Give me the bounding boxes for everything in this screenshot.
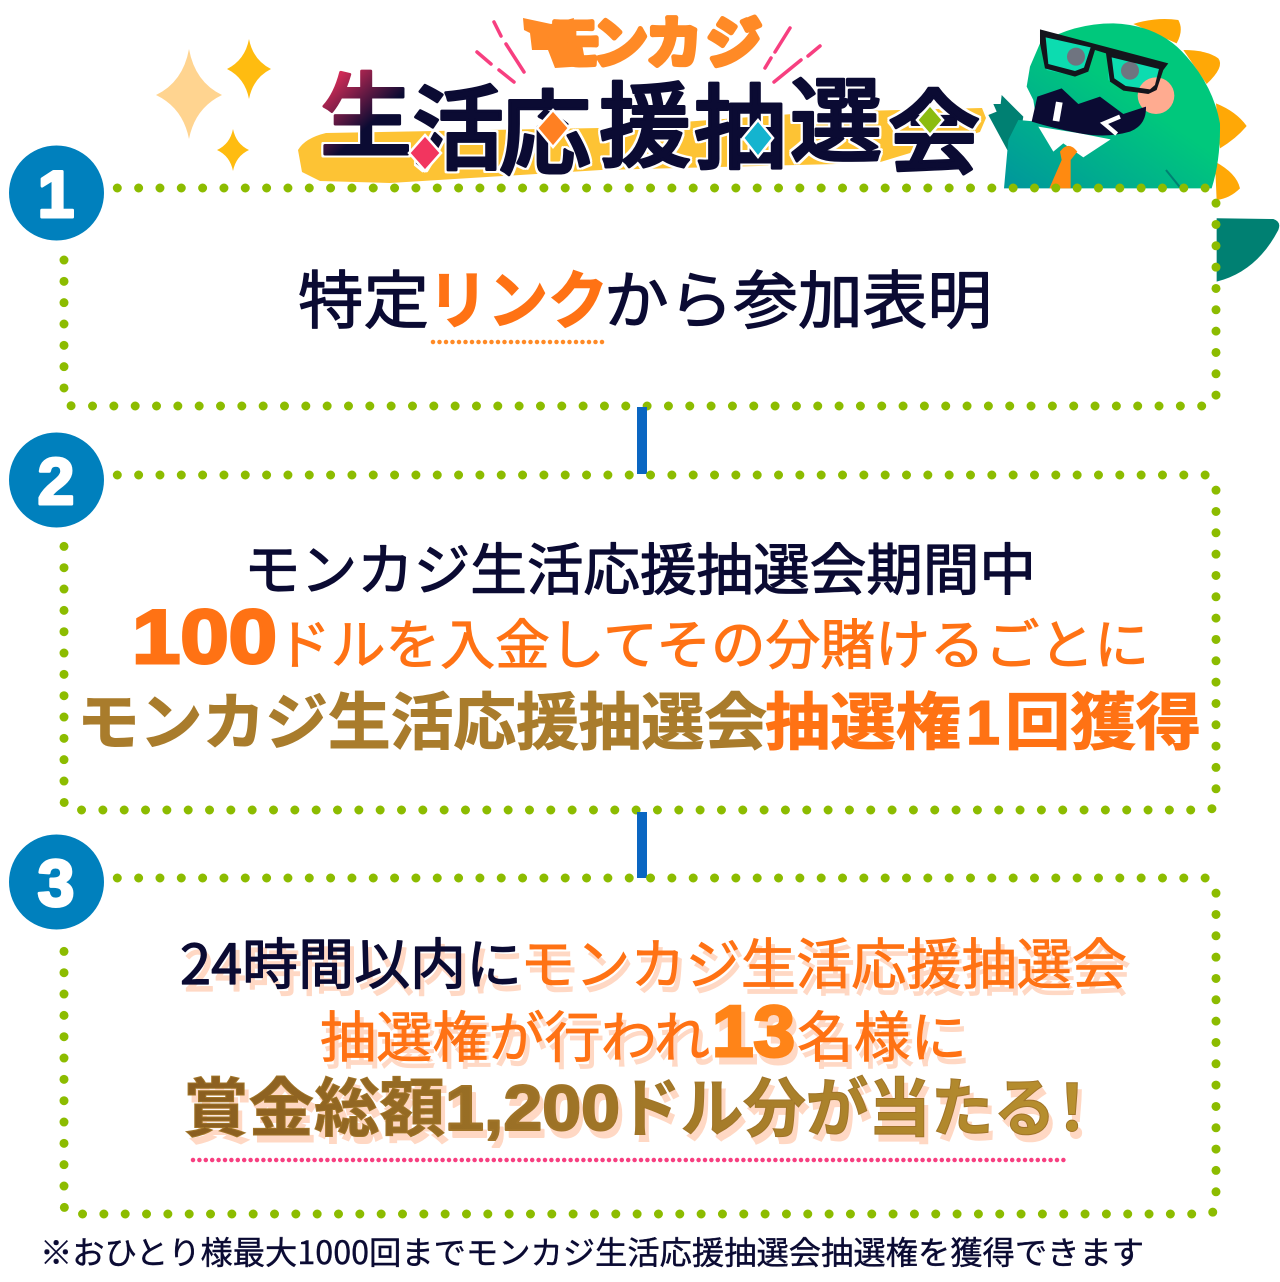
glasses frame [1040, 29, 1168, 94]
footnote: ※おひとり様最大1000回までモンカジ生活応援抽選会抽選権を獲得できます [40, 1228, 1144, 1274]
step 2 text [77, 526, 1201, 762]
panel 2 border [64, 475, 1216, 810]
step 3 text: 24時間以内に [180, 920, 522, 1000]
panel 1 border [64, 188, 1216, 406]
logo wordmark: モンカジ [545, 0, 762, 80]
necktie [1049, 146, 1077, 188]
icon: large peach sparkle [156, 49, 222, 139]
back spikes [1133, 19, 1247, 200]
collar [1038, 127, 1111, 157]
orange dotted underline [433, 340, 603, 344]
step 3 text: ！ [1040, 1058, 1104, 1150]
tooth and wink marks [1053, 102, 1063, 122]
step badge 2 [9, 432, 104, 528]
character: green dinosaur [988, 19, 1279, 282]
step 3 text: 13 [712, 992, 795, 1072]
step badge 1 [9, 146, 104, 240]
step 2 text: ドルを入金してその分賭けるごとに [276, 601, 1149, 680]
step 3 text: 1,200 [445, 1072, 620, 1144]
step 2 text: モンカジ生活応援抽選会 [77, 672, 767, 762]
step 1 text: 特定 [298, 251, 429, 342]
step 2 text: 回獲得 [1005, 672, 1201, 762]
eyes [1067, 48, 1085, 66]
step badge 3 [9, 834, 104, 930]
title diamonds [409, 105, 943, 171]
icon: gold sparkle bottom [217, 129, 249, 171]
glasses lenses [1043, 35, 1095, 76]
body [1004, 23, 1220, 188]
pink burst lines [477, 22, 820, 82]
pink dotted underline [193, 1158, 1068, 1162]
step 2 text: 100 [132, 595, 277, 680]
icon: gold sparkle top [227, 39, 271, 99]
connector 1 to 2 [637, 407, 647, 474]
logo dragon head [523, 18, 586, 68]
step 3 text: ドル分が当たる [618, 1058, 1056, 1150]
step badge 1: 1 [38, 157, 74, 231]
connector 2 to 3 [637, 812, 647, 878]
panel 3 border [64, 878, 1216, 1214]
step 3 text [180, 920, 1127, 1150]
step 3 text: モンカジ生活応援抽選会 [520, 920, 1127, 1000]
yellow brush stroke [298, 108, 986, 183]
step 2 text: 1 [966, 689, 1000, 758]
cheek [1138, 77, 1174, 114]
step 1 text: リンク [428, 251, 608, 342]
step badge 3: 3 [38, 846, 74, 920]
tail [1217, 218, 1279, 282]
step 3 text: 名様に [797, 993, 967, 1073]
step 1 text: から参加表明 [604, 251, 992, 342]
step 3 text: 抽選権が行われ [320, 993, 710, 1073]
step 2 text: 抽選権 [765, 672, 961, 762]
step 3 text: 賞金総額 [183, 1058, 445, 1150]
mouth [1032, 88, 1146, 135]
title text: 生活応援抽選会 [320, 43, 980, 194]
step badge 2: 2 [38, 444, 74, 518]
step 2 text: モンカジ生活応援抽選会期間中 [244, 526, 1036, 607]
step 1 text [298, 251, 992, 342]
raised hand [988, 95, 1023, 157]
title: monkaji lottery logo [298, 0, 986, 194]
